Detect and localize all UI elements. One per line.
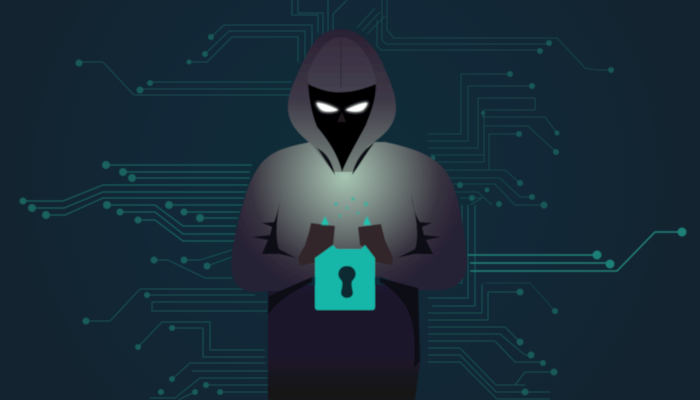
icon: left collar fold: [317, 148, 335, 175]
icon: right collar fold: [352, 142, 375, 175]
icon: left waist shadow: [268, 277, 312, 315]
icon: left sleeve folds: [252, 195, 296, 258]
hood seam: [340, 37, 342, 88]
circuit traces: lower left: [82, 250, 268, 400]
icon: right fingertip: [363, 216, 371, 225]
upper body and arms: [231, 142, 467, 292]
circuit traces: upper right: [357, 0, 614, 208]
icon: right waist shadow: [380, 278, 420, 368]
left hand: [298, 223, 335, 266]
circuit traces: upper left: [76, 0, 347, 95]
hood cap: [308, 37, 376, 93]
icon: left eye glow: [316, 102, 339, 112]
icon: right sleeve folds: [397, 195, 441, 258]
hacker figure: [231, 29, 467, 400]
icon: keyhole: [338, 266, 356, 298]
right hand: [358, 224, 393, 265]
icon: left fingertip: [321, 216, 329, 225]
circuit traces: middle left: [20, 161, 252, 241]
torso: [268, 285, 420, 400]
icon: right eye glow: [345, 102, 368, 112]
circuit traces: bright lower right: [468, 228, 686, 271]
chest glow particles: [334, 198, 368, 217]
hood: [288, 29, 396, 172]
icon: left eye: [317, 103, 338, 112]
padlock: [315, 245, 375, 310]
face shadow: [308, 84, 376, 172]
circuit traces: lower right: [428, 205, 558, 399]
icon: right eye: [346, 103, 367, 112]
nose: [337, 112, 346, 122]
